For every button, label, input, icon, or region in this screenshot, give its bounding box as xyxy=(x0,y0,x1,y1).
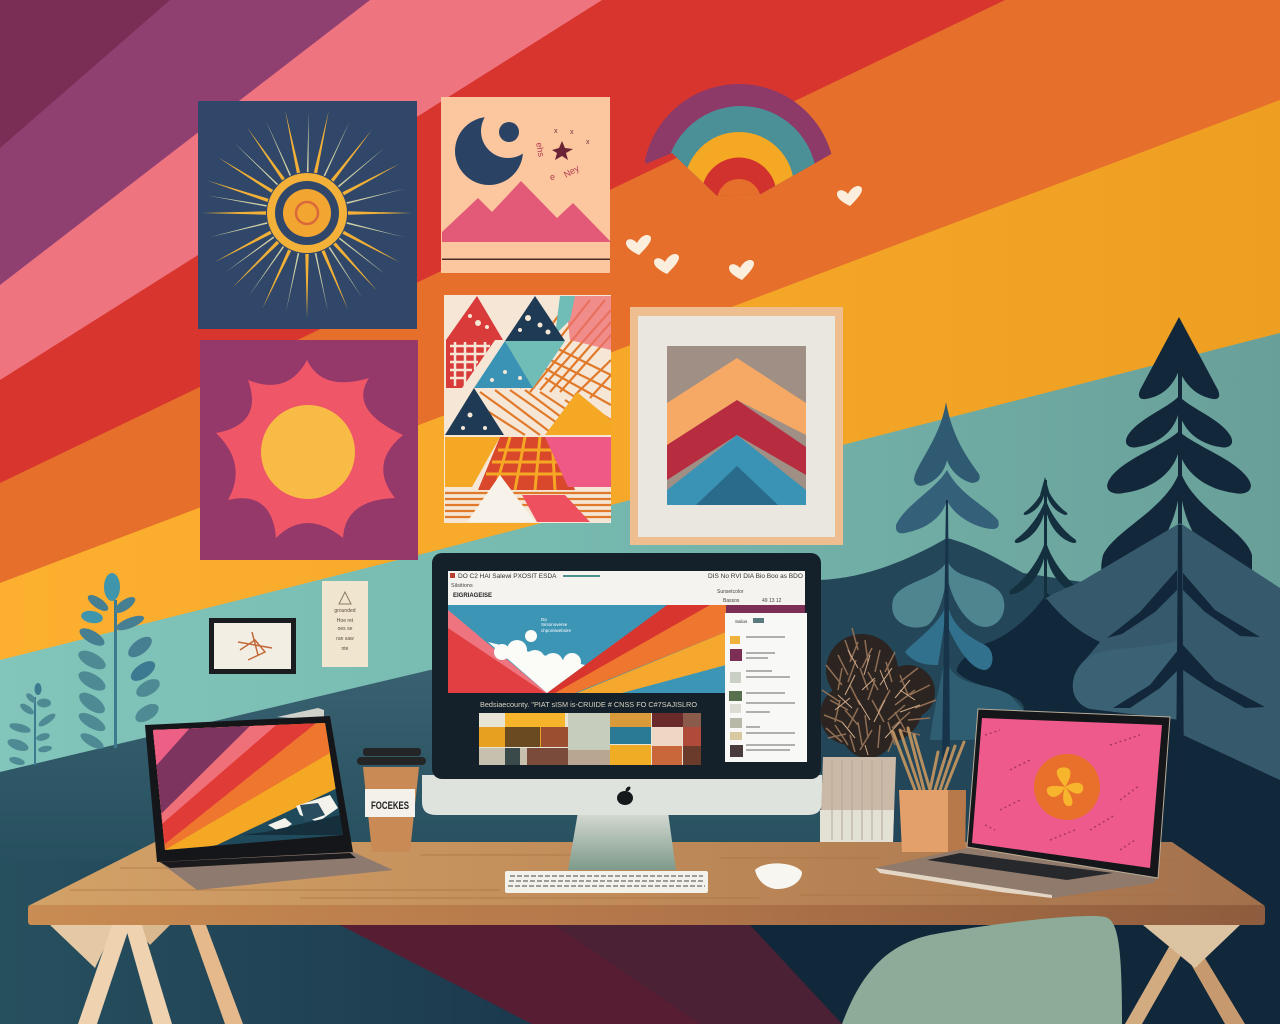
keyboard xyxy=(505,871,708,893)
tree: small xyxy=(1009,477,1082,600)
framed print: chevrons xyxy=(630,307,843,545)
wall: lower area below the desk xyxy=(0,860,1280,1024)
pencil pot xyxy=(893,728,966,852)
hearts xyxy=(626,186,862,280)
plant mural: small xyxy=(6,683,57,766)
orange line hatching xyxy=(445,300,611,517)
laptop base xyxy=(157,852,393,890)
monitor stand xyxy=(568,812,676,870)
poster: navy sunburst xyxy=(198,101,417,329)
red check xyxy=(446,340,495,388)
tree: medium xyxy=(892,402,1025,760)
star and scribbles: Ney xyxy=(562,163,581,180)
top tier xyxy=(914,402,980,486)
browser header xyxy=(448,571,805,605)
sidebar: Salios xyxy=(735,619,748,624)
note card: Hoe ret xyxy=(337,618,354,624)
rainbow xyxy=(645,84,832,196)
monitor xyxy=(422,553,822,870)
poster: moon and mountains xyxy=(441,97,611,273)
note card: oes se xyxy=(338,626,353,632)
laptop keyboard xyxy=(927,853,1113,880)
wall: dark left hill xyxy=(0,640,821,860)
wall: big hill xyxy=(1046,523,1280,780)
laptop base xyxy=(875,848,1158,898)
yellow down triangle xyxy=(445,437,500,487)
mouse xyxy=(755,863,802,889)
browser header: 49 13 12 xyxy=(762,598,782,604)
laptop screen xyxy=(153,723,343,850)
star and scribbles: x xyxy=(586,139,590,146)
trunk xyxy=(942,500,950,760)
monitor chin xyxy=(422,775,822,815)
coffee cup: FOCEKES xyxy=(371,800,409,812)
pot xyxy=(820,757,896,842)
wall: darkest hollow xyxy=(957,593,1280,860)
tree: large, lower stripes and trunk xyxy=(1107,525,1265,780)
star and scribbles: ehs xyxy=(534,142,546,158)
pink mountains xyxy=(442,181,611,242)
star and scribbles: e xyxy=(550,172,555,182)
thumbnail mosaic xyxy=(479,713,701,765)
red trapezoid xyxy=(522,495,590,522)
pot body xyxy=(899,790,966,852)
browser header: Bassos xyxy=(723,598,740,604)
wall: mid hill right of monitor xyxy=(820,538,1090,860)
note card: nte xyxy=(342,646,349,652)
browser header: Silsitions xyxy=(451,583,473,589)
small framed sketch xyxy=(209,618,296,674)
browser header: Sunsetcolor xyxy=(717,589,744,595)
laptop lid xyxy=(145,716,353,862)
navy triangle lower xyxy=(445,388,504,435)
browser header: DIS No RVI DIA Bio Boo as BDO xyxy=(708,573,803,580)
lowest tier xyxy=(930,653,1025,740)
sun rays xyxy=(202,110,412,318)
yellow triangle xyxy=(545,392,611,435)
poster: purple with pink sun xyxy=(200,340,418,560)
cup lid xyxy=(357,748,426,765)
hero banner xyxy=(448,605,726,693)
star and scribbles: x xyxy=(554,128,558,135)
left laptop xyxy=(145,716,393,890)
teal triangle xyxy=(505,341,565,388)
navy triangle xyxy=(505,296,565,341)
bulb tier xyxy=(892,560,1004,628)
tree: large, upper tiers xyxy=(1101,317,1252,590)
blue tier xyxy=(905,603,992,670)
cup label xyxy=(365,789,415,817)
second tier xyxy=(896,470,999,533)
browser header: DO C2 HAI Salewi PXOSIT ESDA xyxy=(458,573,557,580)
desk top xyxy=(28,842,1265,925)
white dots xyxy=(461,314,550,430)
moon dot xyxy=(499,122,519,142)
white triangle xyxy=(467,475,535,522)
note card xyxy=(322,581,368,667)
yellow sun xyxy=(261,405,355,499)
mountain clouds xyxy=(268,795,338,832)
star and scribbles xyxy=(534,128,590,182)
right laptop xyxy=(875,709,1170,898)
sun disc xyxy=(267,173,347,253)
coffee cup xyxy=(357,748,426,852)
orange circle xyxy=(1034,754,1100,820)
pink block xyxy=(545,437,611,487)
browser header: EIGRIAGEISE xyxy=(453,593,492,599)
flower petals xyxy=(1047,767,1083,806)
desk legs xyxy=(50,925,1245,1024)
hero banner: chpomiwebsire xyxy=(541,628,572,633)
pink star burst xyxy=(216,360,403,538)
laptop screen xyxy=(972,718,1162,868)
red triangle xyxy=(446,296,503,340)
note card: grounded xyxy=(334,608,356,614)
star and scribbles: x xyxy=(570,129,574,136)
monitor bezel xyxy=(432,553,821,779)
chair xyxy=(842,916,1122,1024)
plant mural: tall xyxy=(75,573,163,752)
clouds xyxy=(488,630,585,693)
screen heading: Bedsiaecounty. "PIAT sISM is-CRUIDE # CNSS FO C#7SAJISLRO xyxy=(480,700,697,709)
cup body xyxy=(363,767,419,852)
poster: patterned triangles xyxy=(444,295,611,523)
potted plant xyxy=(820,628,936,842)
note card: ran saw xyxy=(336,636,354,642)
laptop lid xyxy=(967,709,1170,878)
sidebar xyxy=(725,605,807,762)
crescent moon xyxy=(455,104,535,185)
blue triangle xyxy=(474,341,533,388)
apple icon xyxy=(617,786,633,805)
pencils xyxy=(893,728,964,790)
foliage xyxy=(820,628,936,758)
orange grid xyxy=(478,437,575,490)
paper shape behind laptop xyxy=(277,708,324,720)
hero banner: Sirsonoverse xyxy=(541,622,568,627)
hero banner: Da xyxy=(541,617,547,622)
